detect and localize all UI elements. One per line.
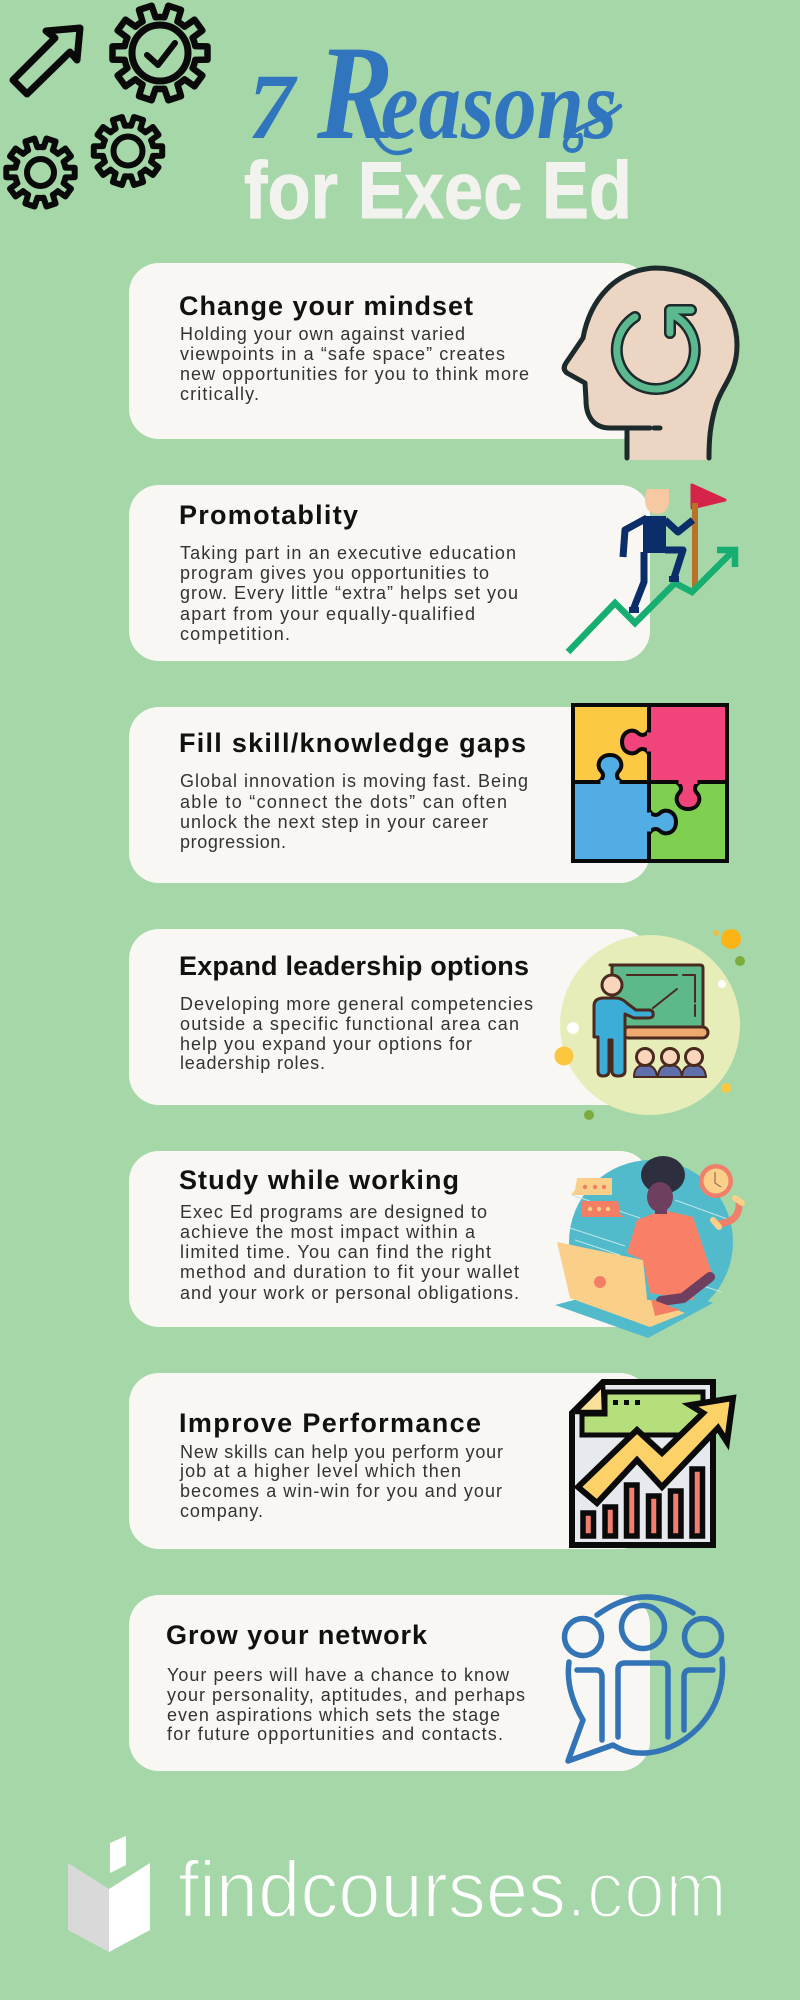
body text: and your work or personal obligations. — [180, 1283, 519, 1303]
body text: outside a specific functional area can — [180, 1014, 519, 1034]
panel: improve performance — [129, 1373, 733, 1549]
card background — [129, 263, 650, 439]
panel: fill skill gaps — [129, 705, 727, 883]
card background — [129, 929, 650, 1105]
icon: book logo — [68, 1836, 150, 1952]
icon: up-right arrow — [13, 28, 80, 94]
heading: Fill skill/knowledge gaps — [179, 728, 526, 758]
card background — [129, 707, 650, 883]
body text — [179, 1442, 503, 1521]
icon: small gear lower left — [0, 129, 84, 216]
wordmark suffix: .com — [566, 1845, 727, 1934]
body text — [180, 543, 518, 644]
body text: becomes a win-win for you and your — [180, 1481, 502, 1501]
icon: small gear upper right — [84, 108, 172, 194]
body text: for future opportunities and contacts. — [167, 1724, 503, 1744]
icon: puzzle — [573, 705, 727, 861]
title script flourish — [372, 106, 620, 153]
body text: unlock the next step in your career — [180, 812, 488, 832]
heading: Expand leadership options — [179, 951, 529, 981]
panel: grow your network — [129, 1595, 723, 1771]
card background — [129, 485, 650, 661]
wordmark: findcourses — [178, 1845, 566, 1934]
body text: Taking part in an executive education — [180, 543, 516, 563]
heading: Promotablity — [179, 500, 358, 530]
body text: program gives you opportunities to — [180, 563, 489, 583]
body text: grow. Every little “extra” helps set you — [180, 583, 518, 603]
body text: viewpoints in a “safe space” creates — [180, 344, 505, 364]
panel: promotability — [129, 485, 735, 661]
card background — [129, 1373, 650, 1549]
body text: help you expand your options for — [180, 1034, 472, 1054]
icon: people in speech bubble — [564, 1597, 723, 1761]
logo: findcourses.com — [68, 1836, 727, 1952]
body text: apart from your equally-qualified — [180, 604, 475, 624]
heading: Change your mindset — [179, 291, 473, 321]
body text — [180, 1202, 519, 1303]
icon: large gear with check — [99, 0, 221, 113]
body text: Exec Ed programs are designed to — [180, 1202, 487, 1222]
body text: company. — [180, 1501, 263, 1521]
icon: person on laptop — [555, 1156, 742, 1338]
body text — [167, 1665, 525, 1744]
body text: your personality, aptitudes, and perhaps — [167, 1685, 525, 1705]
body text: Global innovation is moving fast. Being — [180, 771, 528, 791]
icon: teacher at board — [554, 929, 745, 1120]
body text: critically. — [180, 384, 259, 404]
body text: new opportunities for you to think more — [180, 364, 529, 384]
body text: leadership roles. — [180, 1053, 325, 1073]
title subtitle: for Exec Ed — [244, 146, 632, 236]
body text — [180, 994, 533, 1073]
body text: Your peers will have a chance to know — [167, 1665, 510, 1685]
body text: limited time. You can find the right — [180, 1242, 491, 1262]
heading: Study while working — [179, 1165, 459, 1195]
title script word: Reasons — [316, 18, 617, 168]
icon: head with refresh arrow — [564, 268, 737, 460]
body text: even aspirations which sets the stage — [167, 1705, 500, 1725]
title number: 7 — [248, 56, 298, 159]
body text: able to “connect the dots” can often — [180, 792, 507, 812]
body text: Holding your own against varied — [180, 324, 465, 344]
body text: progression. — [180, 832, 286, 852]
body text: achieve the most impact within a — [180, 1222, 476, 1242]
panel: expand leadership options — [129, 929, 745, 1120]
heading: Grow your network — [166, 1620, 428, 1650]
heading: Improve Performance — [179, 1408, 481, 1438]
icon: climbing person with flag — [568, 485, 735, 652]
card background — [129, 1151, 650, 1327]
body text: method and duration to fit your wallet — [180, 1262, 519, 1282]
body text — [180, 771, 528, 852]
body text: Developing more general competencies — [180, 994, 533, 1014]
icon: arrow and gears — [0, 0, 221, 216]
panel: study while working — [129, 1151, 742, 1338]
title — [244, 18, 632, 236]
body text — [180, 324, 529, 404]
icon: rising chart document — [572, 1382, 733, 1545]
card background — [129, 1595, 650, 1771]
body text: competition. — [180, 624, 290, 644]
body text: job at a higher level which then — [179, 1461, 461, 1481]
panel: change your mindset — [129, 263, 737, 460]
body text: New skills can help you perform your — [180, 1442, 503, 1462]
